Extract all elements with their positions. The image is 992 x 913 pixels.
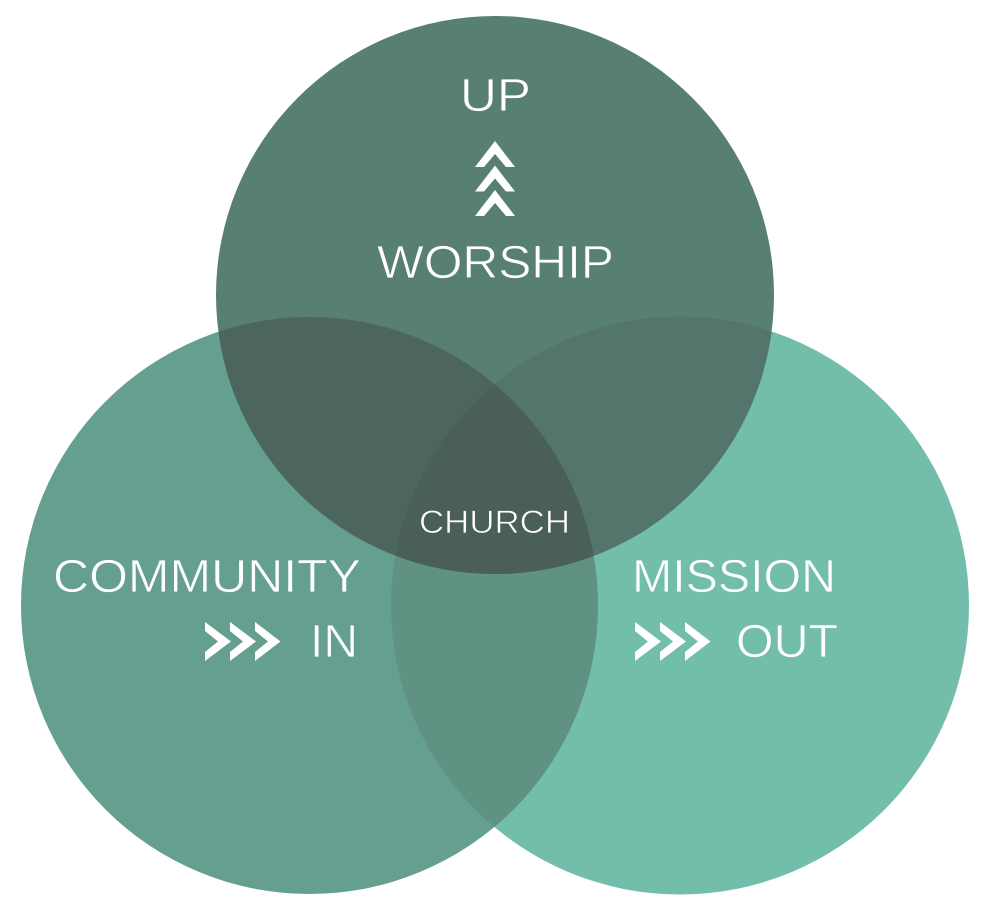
overlap: centre (396, 384, 594, 574)
icon: triple right chevrons (out) (635, 622, 710, 661)
circle: mission (right) (391, 316, 969, 894)
overlap: worship and mission (495, 316, 772, 556)
heading: UP: UP (460, 69, 531, 121)
overlap: worship and community (218, 317, 494, 556)
heading: COMMUNITY: COMMUNITY (53, 550, 361, 602)
label: CHURCH: CHURCH (419, 504, 570, 540)
icon: triple right chevrons (in) (205, 622, 280, 661)
heading: OUT: OUT (736, 615, 838, 667)
circle: worship (top) (216, 16, 774, 574)
icon: triple up chevrons (475, 141, 515, 216)
heading: WORSHIP: WORSHIP (377, 236, 614, 288)
heading: IN: IN (310, 615, 358, 667)
overlap: community and mission (391, 556, 598, 827)
circle: community (left) (21, 317, 598, 894)
heading: MISSION: MISSION (632, 550, 836, 602)
